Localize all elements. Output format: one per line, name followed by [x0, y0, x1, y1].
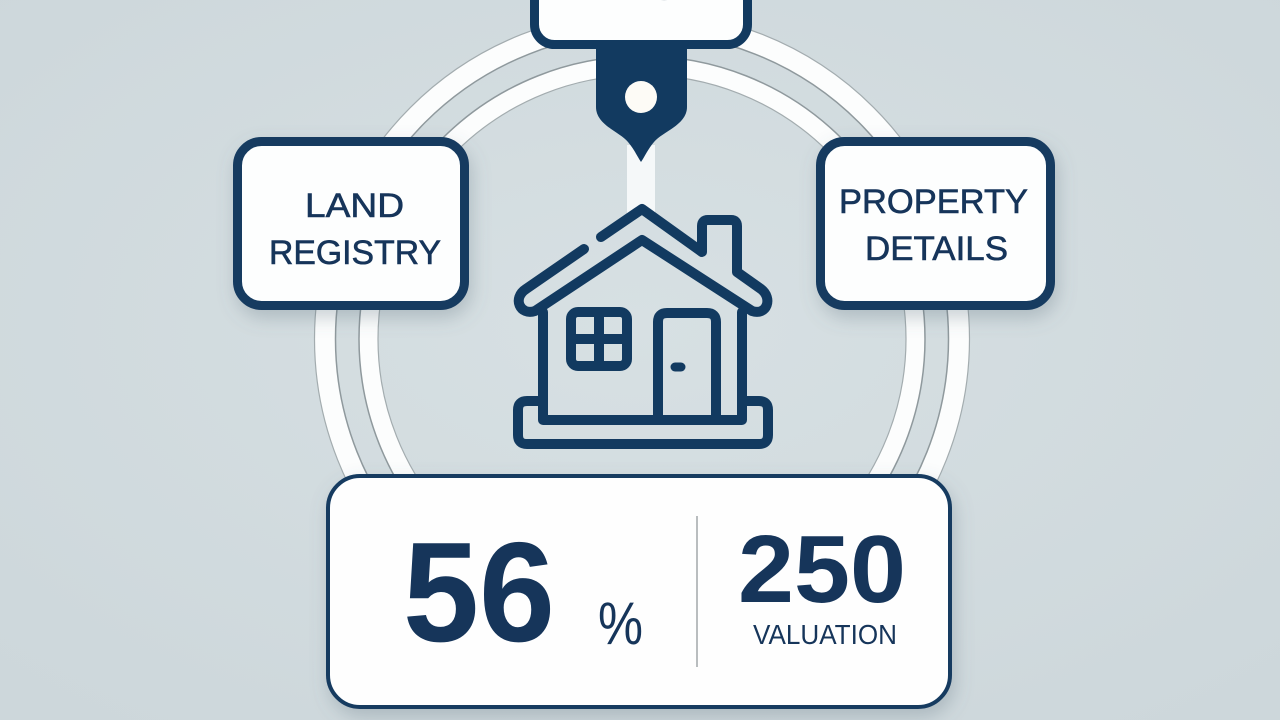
card: land registry: [238, 142, 464, 306]
concentric rings: [314, 12, 970, 666]
roof and chimney: [519, 209, 767, 312]
door knob: [675, 362, 681, 372]
walls: [543, 312, 742, 420]
property details label: DETAILS: [865, 230, 1008, 268]
property details label: PROPERTY: [839, 183, 1028, 221]
top card: [534, 0, 748, 44]
card: property details: [820, 142, 1050, 306]
land registry label: [269, 187, 441, 272]
percent sign: %: [598, 590, 643, 657]
window: [571, 312, 627, 366]
base: [518, 401, 768, 444]
property details label: [839, 183, 1028, 268]
stat: 250: 250: [738, 516, 906, 623]
stats panel: [328, 476, 950, 707]
land registry label: LAND: [305, 187, 404, 225]
stat divider: [696, 516, 698, 667]
connector line: [627, 145, 655, 213]
land registry label: REGISTRY: [269, 234, 441, 272]
door: [658, 313, 716, 420]
stat: 56: 56: [403, 513, 555, 672]
valuation label: VALUATION: [753, 619, 897, 650]
icon: house: [518, 209, 768, 444]
pin marker: [596, 40, 687, 162]
